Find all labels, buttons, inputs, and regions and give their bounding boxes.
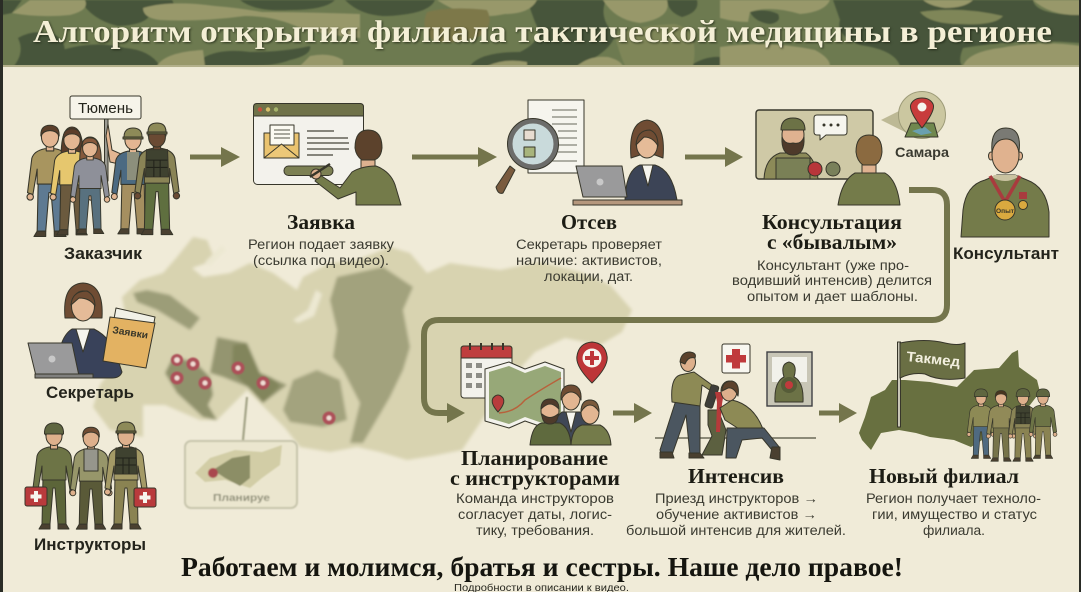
label: Заказчик: Заказчик bbox=[64, 245, 143, 263]
icon: shooting target bbox=[767, 352, 812, 406]
panel: secretary role bbox=[28, 283, 155, 402]
arrow: application to screening bbox=[412, 147, 497, 167]
heading: Планирование bbox=[461, 446, 608, 470]
group of four soldiers bbox=[967, 389, 1057, 461]
icon: sign Тюмень bbox=[70, 96, 141, 181]
panel: instructors role bbox=[25, 422, 156, 554]
icon: first aid card bbox=[722, 344, 750, 373]
icon: three instructors with medical bags bbox=[25, 422, 156, 529]
background map of Russia with pins bbox=[93, 237, 632, 460]
icon: flag Такмед bbox=[898, 340, 965, 427]
person from behind bbox=[838, 135, 900, 205]
secretary at laptop bbox=[573, 120, 682, 205]
heading: Заявка: Заявка bbox=[287, 210, 356, 234]
icon: browser window with envelope bbox=[254, 104, 364, 184]
arrow: connector from top row to bottom row bbox=[424, 190, 947, 423]
map pins bbox=[170, 354, 336, 424]
icon: calendar bbox=[461, 343, 512, 398]
description: Команда инструкторов bbox=[456, 491, 614, 506]
heading: с «бывалым» bbox=[767, 230, 897, 254]
header camouflage band bbox=[0, 0, 1081, 67]
title: Алгоритм открытия филиала тактической медицины в регионе bbox=[33, 13, 1052, 49]
person filling the form bbox=[310, 130, 401, 205]
description: наличие: активистов, bbox=[516, 253, 662, 268]
label: Консультант: Консультант bbox=[953, 245, 1059, 263]
panel: intensive (Интенсив) bbox=[626, 344, 846, 538]
group of five people bbox=[27, 123, 180, 237]
icon: sign Тюмень: Тюмень bbox=[78, 101, 133, 117]
icon: medical location pin bbox=[577, 342, 607, 383]
icon: consultant with medal: Опыт bbox=[996, 208, 1014, 215]
heading: Интенсив: Интенсив bbox=[688, 464, 784, 488]
icon: green Russia map bbox=[859, 350, 1040, 450]
arrow: screening to consultation bbox=[685, 147, 743, 167]
label: Самара: Самара bbox=[895, 144, 949, 160]
heading: с инструкторами bbox=[450, 466, 620, 490]
panel: new branch (Новый филиал) bbox=[859, 340, 1057, 538]
description: Регион подает заявку bbox=[248, 237, 394, 252]
description: большой интенсив для жителей. bbox=[626, 523, 846, 538]
panel: application (Заявка) bbox=[248, 104, 401, 268]
icon: flag Такмед: Такмед bbox=[906, 348, 961, 370]
description: тику, требования. bbox=[476, 523, 594, 538]
description: филиала. bbox=[923, 523, 985, 538]
inset map: planned region bbox=[185, 397, 297, 508]
label: Инструкторы: Инструкторы bbox=[34, 536, 146, 554]
illustration: tourniquet training bbox=[655, 352, 816, 460]
description: локации, дат. bbox=[544, 269, 633, 284]
description: обучение активистов → bbox=[656, 507, 817, 522]
icon: secretary with folder and laptop: Заявки bbox=[112, 325, 149, 342]
footer slogan: Работаем и молимся, братья и сестры. Наше дело правое! bbox=[181, 552, 903, 582]
icon: folded map with route bbox=[485, 362, 564, 428]
panel: consultation (Консультация с «бывалым») bbox=[732, 92, 949, 304]
description: опытом и дает шаблоны. bbox=[747, 289, 918, 304]
icon: document with magnifier bbox=[496, 100, 584, 193]
description: Регион получает техноло- bbox=[866, 491, 1041, 506]
inset map: planned region: Планируе bbox=[213, 492, 270, 504]
arrow: planning to intensive bbox=[613, 403, 652, 423]
description: Консультант (уже про- bbox=[757, 258, 909, 273]
description: (ссылка под видео). bbox=[253, 253, 389, 268]
description: согласует даты, логис- bbox=[458, 507, 612, 522]
description: водивший интенсив) делится bbox=[732, 273, 932, 288]
icon: Samara location bbox=[881, 92, 946, 138]
arrow: customer to application bbox=[190, 147, 240, 167]
description: гии, имущество и статус bbox=[872, 507, 1037, 522]
description: Секретарь проверяет bbox=[516, 237, 662, 252]
arrow: intensive to new branch bbox=[819, 403, 857, 423]
three instructors at the map bbox=[530, 385, 611, 445]
icon: video call window bbox=[756, 110, 873, 179]
panel: consultant role bbox=[953, 128, 1059, 263]
panel: screening (Отсев) bbox=[496, 100, 682, 284]
heading: Новый филиал: Новый филиал bbox=[869, 464, 1019, 488]
description: Приезд инструкторов → bbox=[655, 491, 818, 506]
panel: customer (Заказчик) bbox=[27, 96, 180, 263]
heading: Отсев: Отсев bbox=[561, 210, 617, 234]
heading: Консультация bbox=[762, 210, 902, 234]
panel: planning (Планирование с инструкторами) bbox=[450, 342, 620, 538]
label: Секретарь: Секретарь bbox=[46, 384, 134, 402]
